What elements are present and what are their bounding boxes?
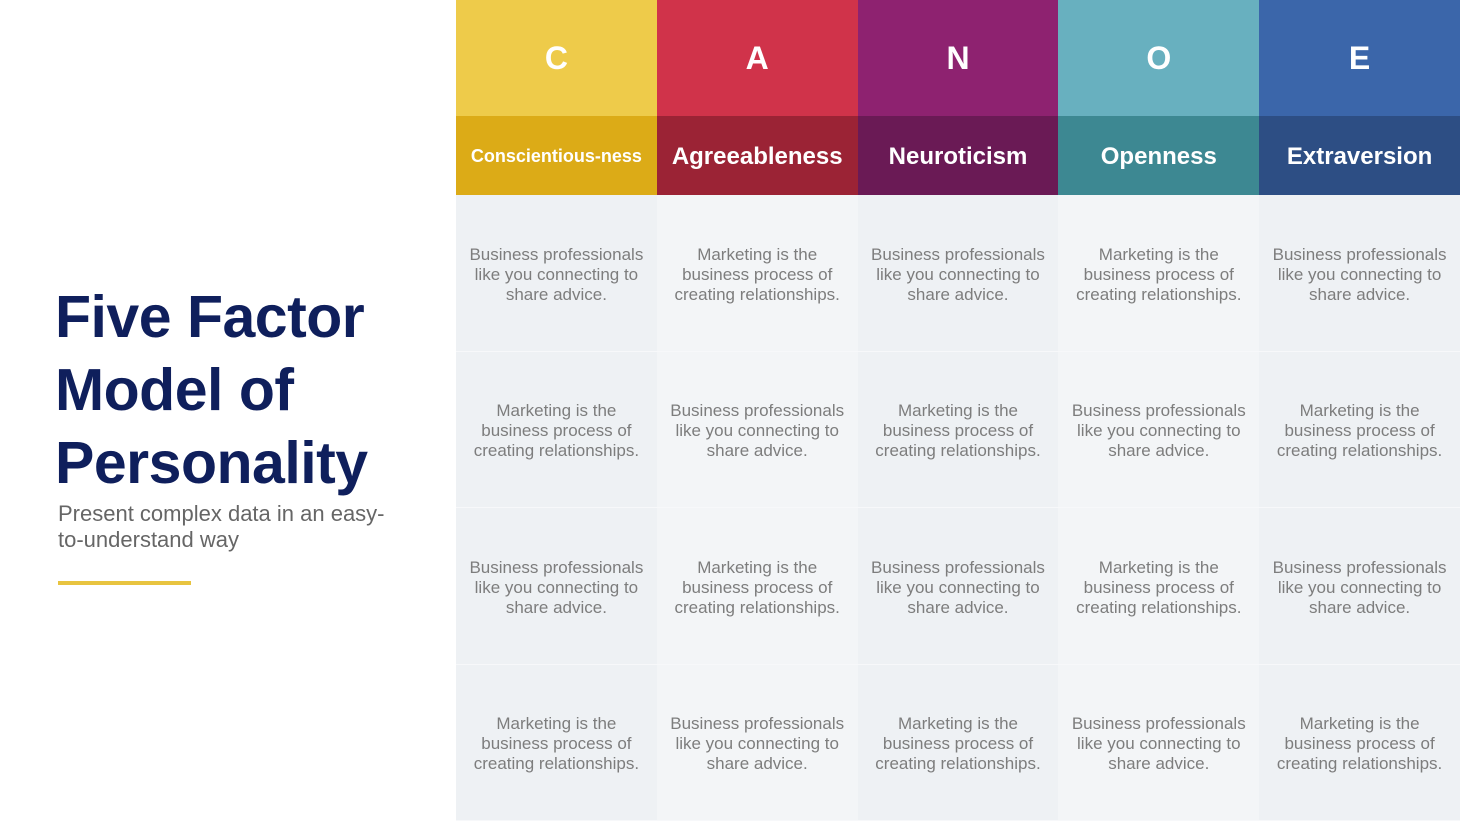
column: extraversion (1259, 0, 1460, 820)
column: agreeableness: Business professionals like you connecting to share advice. (670, 714, 844, 773)
accent bar (58, 581, 191, 585)
column: agreeableness: Agreeableness (672, 142, 843, 170)
column: neuroticism: Business professionals like you connecting to share advice. (871, 245, 1045, 304)
column: agreeableness: Marketing is the business process of creating relationships. (674, 245, 840, 304)
column: neuroticism: Business professionals like you connecting to share advice. (871, 558, 1045, 617)
column: extraversion: Marketing is the business process of creating relationships. (1277, 401, 1442, 460)
column: conscientiousness: C (545, 40, 568, 76)
column: agreeableness: A (746, 40, 769, 76)
column: openness: Marketing is the business process of creating relationships. (1076, 558, 1241, 617)
column: conscientiousness: Marketing is the business process of creating relationships. (474, 714, 639, 773)
column: openness: Business professionals like you connecting to share advice. (1072, 714, 1246, 773)
column: agreeableness (657, 0, 858, 820)
column: conscientiousness: Business professionals like you connecting to share advice. (469, 245, 643, 304)
column: openness: O (1146, 40, 1171, 76)
table grid (456, 0, 1460, 820)
column: conscientiousness: Conscientious-ness (471, 146, 642, 166)
column: neuroticism: Neuroticism (889, 142, 1027, 170)
column: neuroticism: N (946, 40, 970, 76)
column: openness: Marketing is the business process of creating relationships. (1076, 245, 1241, 304)
column: extraversion: E (1349, 40, 1370, 76)
subtitle: Present complex data in an easy-to-understand way (58, 501, 385, 552)
column: openness: Business professionals like you connecting to share advice. (1072, 401, 1246, 460)
column: neuroticism: Marketing is the business process of creating relationships. (875, 714, 1041, 773)
title: Five Factor Model of Personality (55, 284, 368, 496)
column: conscientiousness: Marketing is the business process of creating relationships. (474, 401, 639, 460)
column: agreeableness: Business professionals like you connecting to share advice. (670, 401, 844, 460)
column: neuroticism: Marketing is the business process of creating relationships. (875, 401, 1041, 460)
column: openness: Openness (1101, 142, 1217, 170)
column: extraversion: Marketing is the business process of creating relationships. (1277, 714, 1442, 773)
column: extraversion: Business professionals like you connecting to share advice. (1273, 558, 1447, 617)
column: extraversion: Extraversion (1287, 142, 1432, 170)
column: agreeableness: Marketing is the business process of creating relationships. (674, 558, 840, 617)
column: conscientiousness: Business professionals like you connecting to share advice. (469, 558, 643, 617)
column: openness (1058, 0, 1259, 820)
column: neuroticism (858, 0, 1058, 820)
column: conscientiousness (456, 0, 657, 820)
column: extraversion: Business professionals like you connecting to share advice. (1273, 245, 1447, 304)
